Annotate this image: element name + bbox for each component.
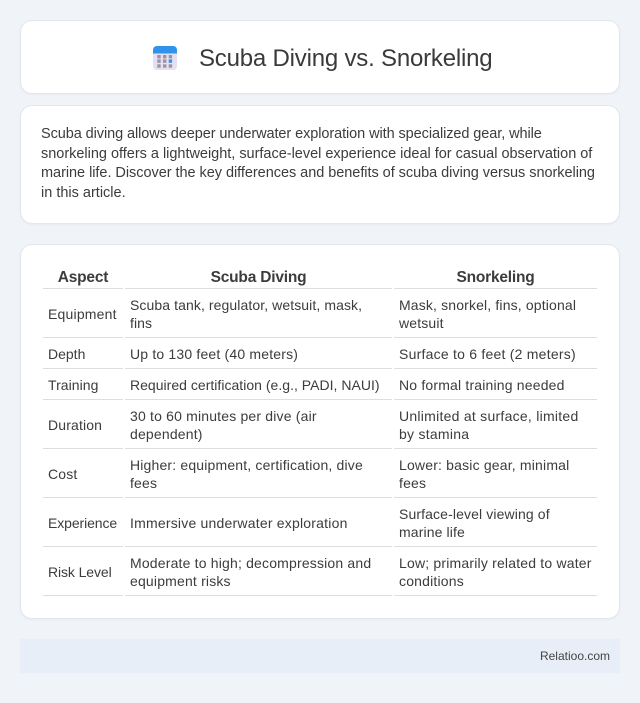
- comparison table: Required certification (e.g., PADI, NAUI): [130, 377, 380, 393]
- row: experience: [48, 506, 550, 540]
- footer text: Relatioo.com: [540, 649, 610, 663]
- comparison table: Cost: [48, 466, 77, 482]
- comparison table: Equipment: [48, 306, 117, 322]
- comparison table: Moderate to high; decompression and: [130, 555, 371, 571]
- comparison table: Surface-level viewing of: [399, 506, 550, 522]
- comparison table: Up to 130 feet (40 meters): [130, 346, 298, 362]
- row: risk level: [48, 555, 592, 589]
- intro panel: [20, 105, 620, 224]
- comparison table: dependent): [130, 426, 203, 442]
- comparison table: Unlimited at surface, limited: [399, 408, 578, 424]
- comparison table: Mask, snorkel, fins, optional: [399, 297, 576, 313]
- row: cost: [48, 457, 569, 491]
- intro text: in this article.: [41, 184, 126, 200]
- header: aspect: Aspect: [58, 269, 108, 286]
- comparison table: marine life: [399, 524, 465, 540]
- comparison table: equipment risks: [130, 573, 231, 589]
- row: depth: [48, 346, 576, 362]
- table panel: [20, 244, 620, 619]
- comparison table: Surface to 6 feet (2 meters): [399, 346, 576, 362]
- intro text: Scuba diving allows deeper underwater exploration with specialized gear, while: [41, 126, 542, 142]
- row: training: [48, 377, 565, 393]
- header: scuba diving: Scuba Diving: [211, 269, 306, 286]
- comparison table: Training: [48, 377, 98, 393]
- comparison table: Immersive underwater exploration: [130, 515, 348, 531]
- comparison table: by stamina: [399, 426, 469, 442]
- title: Scuba Diving vs. Snorkeling: [199, 45, 492, 72]
- comparison table: Higher: equipment, certification, dive: [130, 457, 363, 473]
- comparison table: fees: [399, 475, 426, 491]
- title panel: [20, 20, 620, 94]
- comparison table: wetsuit: [399, 315, 444, 331]
- comparison table: Duration: [48, 417, 102, 433]
- intro text: snorkeling offers a lightweight, surface-level experience ideal for casual observation of: [41, 146, 592, 162]
- comparison table: Low; primarily related to water: [399, 555, 592, 571]
- comparison table: fees: [130, 475, 157, 491]
- row: duration: [48, 408, 578, 442]
- header: snorkeling: Snorkeling: [456, 269, 535, 286]
- comparison table: Scuba tank, regulator, wetsuit, mask,: [130, 297, 362, 313]
- footer bar: [20, 639, 620, 673]
- comparison table: Lower: basic gear, minimal: [399, 457, 569, 473]
- comparison table: Experience: [48, 515, 117, 531]
- comparison table: Risk Level: [48, 564, 112, 580]
- comparison table: 30 to 60 minutes per dive (air: [130, 408, 317, 424]
- icon: calendar: [153, 46, 177, 70]
- comparison table: Depth: [48, 346, 85, 362]
- comparison table: conditions: [399, 573, 464, 589]
- comparison table: No formal training needed: [399, 377, 565, 393]
- comparison table: fins: [130, 315, 152, 331]
- intro text: marine life. Discover the key differences and benefits of scuba diving versus snorkeling: [41, 165, 595, 181]
- row: equipment: [48, 297, 576, 331]
- intro text: [41, 126, 595, 200]
